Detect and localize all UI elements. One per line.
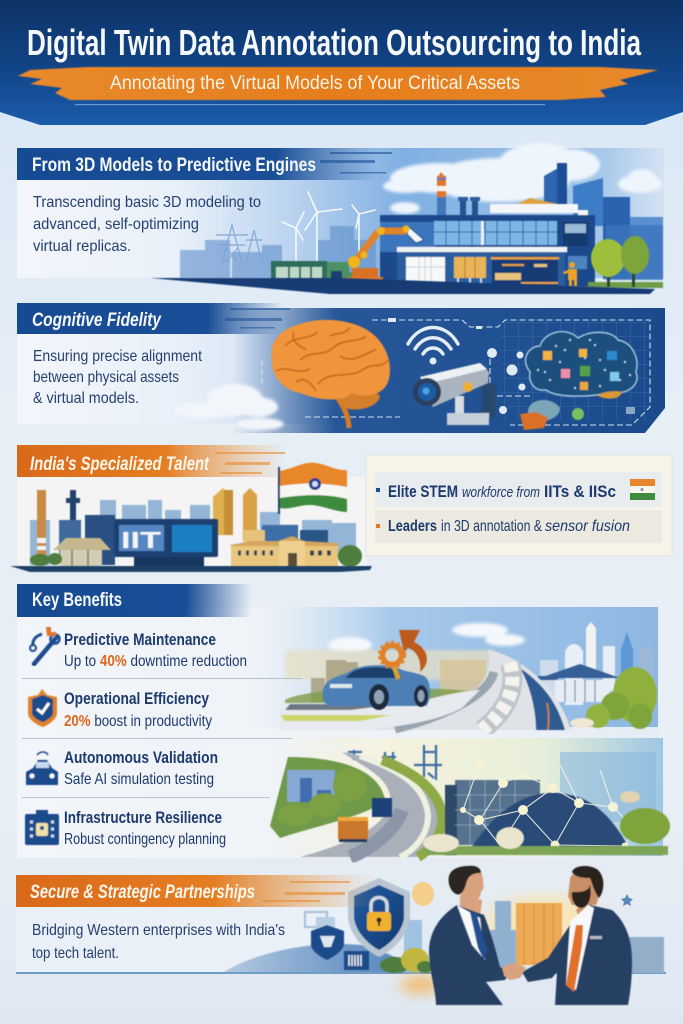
text: Autonomous Validation: [64, 748, 218, 767]
panel title: [17, 148, 392, 180]
highlights card: [366, 455, 672, 556]
shrubs and grass: [423, 791, 670, 855]
ground strip: [150, 278, 655, 294]
panel title: [17, 303, 290, 334]
wifi icon: [408, 328, 458, 364]
sky: [270, 738, 663, 856]
india flag: [278, 463, 347, 514]
text: Infrastructure Resilience: [64, 808, 222, 827]
skyline: [404, 901, 664, 973]
skyline background: [30, 500, 356, 565]
trees: [588, 236, 663, 288]
small orange brain: [520, 400, 584, 430]
pale blue right sky: [560, 752, 656, 822]
ground strip: [10, 566, 372, 572]
factory worker: [563, 262, 577, 288]
solar field: [445, 780, 540, 855]
factory building: [380, 198, 595, 287]
divider: [22, 797, 270, 798]
yellow heritage building: [230, 530, 338, 567]
text: Safe AI simulation testing: [64, 771, 214, 788]
green embankment: [270, 757, 385, 838]
trees left: [277, 768, 367, 826]
lower-left clouds: [175, 384, 284, 430]
IIT monitor: [114, 519, 218, 567]
panel: cognitive fidelity: [17, 303, 665, 433]
body text: Transcending basic 3D modeling to: [33, 194, 261, 211]
divider: [22, 738, 292, 739]
heading: From 3D Models to Predictive Engines: [32, 154, 316, 176]
text: 20% boost in productivity: [64, 713, 212, 730]
circuit nodes: [388, 318, 635, 414]
title bar: [17, 148, 377, 180]
body text: between physical assets: [33, 369, 179, 386]
heading: Secure & Strategic Partnerships: [30, 881, 255, 903]
panel background: [17, 334, 337, 424]
background buildings: [311, 660, 486, 702]
subtitle brush stroke: [18, 67, 658, 100]
businessman left: [429, 866, 510, 1005]
blue buildings: [262, 525, 328, 560]
orange truck: [338, 817, 368, 842]
hut: [53, 538, 111, 567]
blue car: [323, 665, 430, 710]
gear and arrow icon: [379, 630, 427, 680]
text: Robust contingency planning: [64, 831, 226, 848]
bullet: [376, 488, 380, 492]
highlight text 2: in 3D annotation &: [441, 518, 542, 535]
fading left scenery: [285, 650, 495, 680]
body text: [32, 922, 285, 962]
trees: [570, 667, 657, 729]
heading: Cognitive Fidelity: [32, 309, 162, 331]
star: [621, 894, 633, 906]
businessman right: [522, 866, 632, 1005]
network links: [463, 760, 634, 846]
distant city silhouette: [180, 226, 376, 278]
icon: connected car: [26, 752, 58, 785]
banner background: [0, 0, 683, 125]
body text: Bridging Western enterprises with India's: [32, 922, 285, 939]
title bar: [17, 303, 282, 334]
body text: advanced, self-optimizing: [33, 216, 199, 233]
body text: & virtual models.: [33, 390, 139, 407]
distant blue towers: [544, 163, 663, 280]
gold towers: [213, 488, 257, 540]
curved horizon: [222, 944, 430, 973]
title banner: [0, 0, 683, 125]
blue truck: [372, 798, 392, 817]
heading: Key Benefits: [32, 589, 122, 611]
panel background: [17, 607, 658, 858]
sun: [412, 882, 434, 906]
title bar: [17, 445, 287, 477]
highlight text 1: workforce from: [462, 484, 540, 501]
highlight text 2: sensor fusion: [545, 518, 630, 535]
dark hill: [470, 793, 630, 850]
industrial towers: [37, 490, 115, 565]
row background: [375, 510, 662, 543]
benefit: autonomous validation: [26, 748, 218, 788]
green low building: [271, 261, 405, 288]
IIT monitor: IIT: [121, 527, 161, 553]
highlight text 2: [388, 518, 630, 535]
blue building: [287, 770, 335, 802]
wind turbines: [282, 192, 375, 262]
highlight text 1: IITs & IISc: [544, 482, 616, 501]
road scene 2: [270, 738, 670, 857]
body text: Ensuring precise alignment: [33, 348, 202, 365]
chimneys: [437, 172, 480, 216]
benefit: predictive maintenance: [30, 627, 247, 670]
icon: shield check: [28, 689, 57, 727]
text: Predictive Maintenance: [64, 630, 216, 649]
green hedge: [285, 688, 490, 705]
shrubs: [380, 948, 433, 973]
icon: wrench: [30, 627, 60, 664]
bushes: [30, 545, 362, 567]
divider: [22, 678, 302, 679]
power pylons: [216, 225, 262, 263]
panel background: [17, 148, 664, 278]
panel: India's specialized talent: [10, 445, 672, 572]
panel background: [17, 477, 367, 567]
bullet: [376, 524, 380, 528]
clouds: [383, 143, 662, 214]
circuit grid: [500, 320, 650, 420]
icon: secured building: [25, 810, 59, 845]
glow behind partners: [400, 895, 607, 993]
body text: top tech talent.: [32, 945, 119, 962]
curving highway: [300, 752, 446, 857]
highlight text 1: Elite STEM: [388, 482, 458, 501]
small shapes: screens, shield, barcode: [305, 912, 369, 970]
mini flag: [630, 479, 655, 500]
body text: [33, 194, 261, 255]
city skyline: [540, 622, 653, 705]
dark tech background: [195, 308, 665, 433]
text: [64, 748, 218, 788]
road scene 1: [250, 607, 658, 730]
text: Operational Efficiency: [64, 689, 209, 708]
clouds: [328, 623, 525, 653]
benefit: infrastructure resilience: [25, 808, 226, 848]
title bar: [17, 584, 252, 617]
panel: key benefits: [17, 584, 670, 858]
text: [64, 630, 247, 670]
panel title: [16, 875, 376, 907]
highlight text 2: Leaders: [388, 518, 437, 535]
network graph: [460, 758, 638, 850]
panel: secure and strategic partnerships: [16, 866, 666, 1005]
curving road: [361, 650, 571, 730]
title bar: [16, 875, 376, 907]
handshake: [502, 964, 526, 980]
text: [64, 689, 212, 730]
network nodes: [460, 758, 638, 850]
heading: India's Specialized Talent: [30, 453, 210, 475]
sky: [250, 607, 658, 727]
foreground road: [280, 690, 480, 730]
benefit: operational efficiency: [28, 689, 212, 730]
security camera: [413, 363, 496, 425]
body text: virtual replicas.: [33, 238, 131, 255]
card background: [366, 455, 672, 556]
subtitle: Annotating the Virtual Models of Your Critical Assets: [110, 73, 520, 94]
panel title: [17, 584, 252, 617]
text: [64, 808, 226, 848]
data cloud: [525, 332, 637, 399]
bottom rule: [16, 972, 666, 974]
panel background: [16, 907, 356, 973]
circuit lines: [262, 320, 650, 425]
panel: from 3D models to predictive engines: [17, 143, 664, 294]
big security shield: [348, 878, 410, 957]
panel title: [17, 445, 287, 477]
pylons: [348, 745, 442, 780]
highlight text 1: [388, 482, 616, 501]
text: Up to 40% downtime reduction: [64, 653, 247, 670]
body text: [33, 348, 202, 407]
blue house: [538, 664, 620, 702]
robot arm: [347, 225, 424, 283]
row background: [375, 472, 662, 507]
brain: [271, 320, 390, 428]
